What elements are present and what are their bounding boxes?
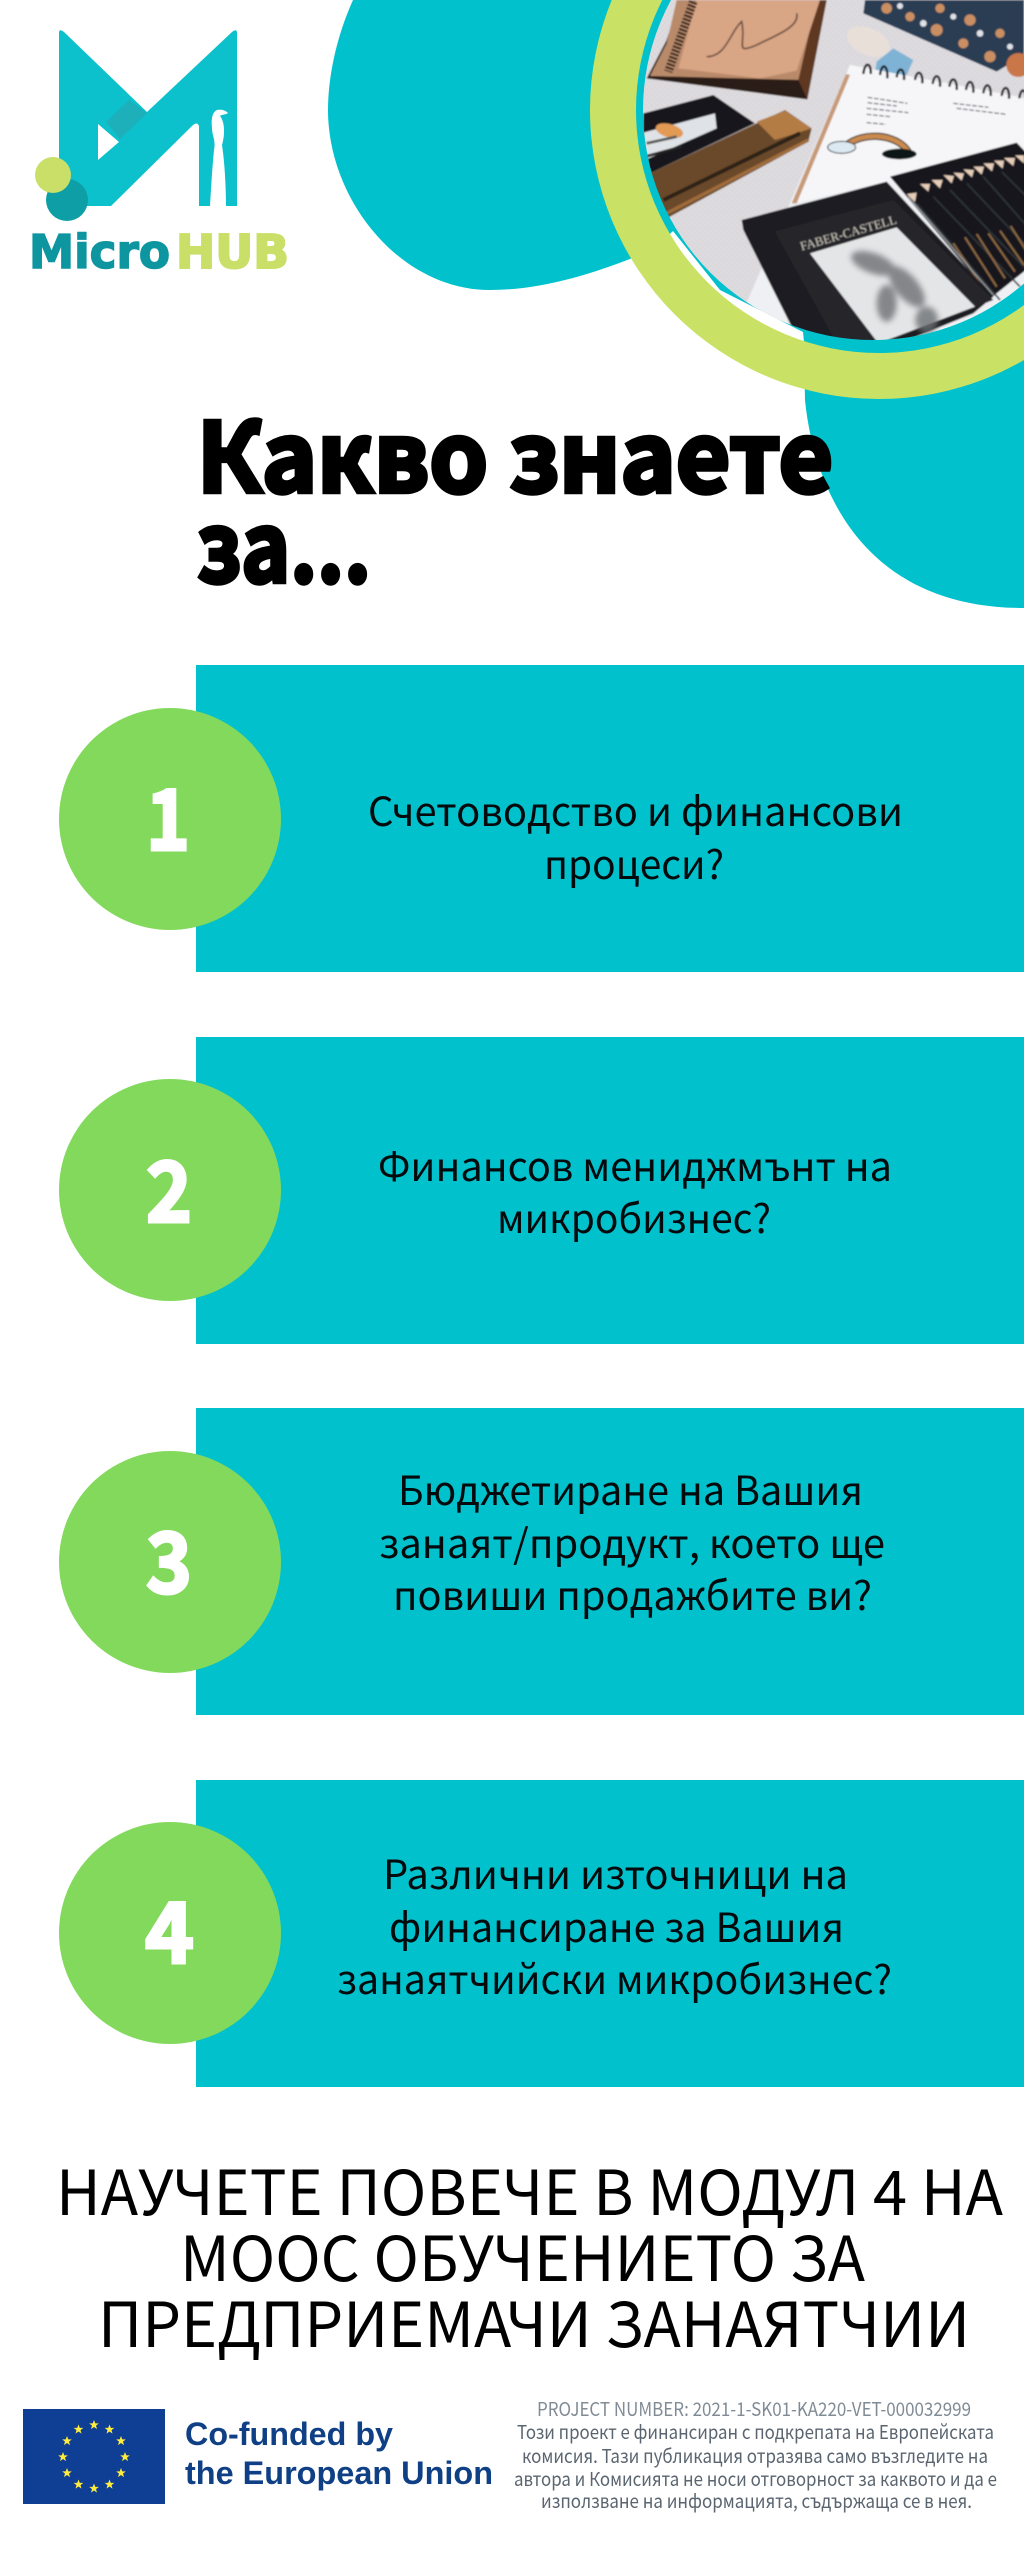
photo: art supplies on a table	[643, 0, 1024, 340]
panel: question 4	[59, 1780, 1024, 2087]
panel: question 3	[59, 1408, 1024, 1715]
icon: EU flag	[23, 2409, 165, 2504]
logo wordmark: HUB	[176, 225, 289, 279]
co-funded label: the European Union	[185, 2455, 493, 2491]
call to action heading: НАУЧЕТЕ ПОВЕЧЕ В МОДУЛ 4 НА	[56, 2143, 1003, 2233]
translucent brown case	[650, 110, 812, 218]
title	[197, 381, 833, 610]
notebook page	[746, 124, 1024, 336]
question text 3: занаят/продукт, което ще	[379, 1512, 885, 1570]
logo: MicroHUB	[29, 30, 289, 279]
logo wordmark: Micro	[29, 225, 170, 279]
disclaimer text: PROJECT NUMBER: 2021-1-SK01-KA220-VET-000032999	[537, 2395, 971, 2422]
question text 2: микробизнес?	[497, 1187, 771, 1245]
photo: art supplies on a table: FABER-CASTELL	[799, 213, 898, 254]
question text 4: финансиране за Вашия	[389, 1896, 844, 1954]
floral pencil case	[863, 0, 1024, 72]
pencil tin	[890, 143, 1024, 297]
co-funded label: Co-funded by	[185, 2416, 393, 2452]
question text 2: Финансов мениджмънт на	[378, 1135, 892, 1193]
decorative teal blob: right	[803, 300, 1024, 608]
disclaimer text	[514, 2395, 997, 2514]
question text 1	[368, 780, 903, 891]
number badge 3: 3	[146, 1497, 192, 1618]
logo mark: M	[59, 30, 237, 206]
title: Какво знаете	[197, 381, 833, 520]
call to action heading	[56, 2143, 1003, 2365]
call to action heading: ПРЕДПРИЕМАЧИ ЗАНАЯТЧИИ	[98, 2275, 970, 2365]
number badge 3	[59, 1451, 281, 1673]
sketch tin	[742, 182, 993, 350]
number badge 1: 1	[146, 754, 190, 875]
sketchbook	[647, 0, 827, 99]
decorative teal blob: top	[328, 0, 720, 290]
question text 3	[379, 1459, 885, 1622]
black brush box	[643, 95, 755, 173]
erasers	[848, 26, 890, 57]
number badge 2: 2	[146, 1126, 192, 1247]
notebook spiral	[863, 65, 1024, 101]
question text 3: повиши продажбите ви?	[393, 1564, 872, 1622]
co-funded label	[185, 2416, 493, 2491]
call to action heading: МООС ОБУЧЕНИЕТО ЗА	[180, 2209, 865, 2299]
question text 4	[337, 1843, 892, 2006]
panel: question 2	[59, 1037, 1024, 1344]
number badge 4	[59, 1822, 281, 2044]
question text 2	[378, 1135, 892, 1245]
number badge 1	[59, 708, 281, 930]
panel: question 1	[59, 665, 1024, 972]
rainbow	[847, 136, 908, 152]
question text 4: занаятчийски микробизнес?	[337, 1948, 892, 2006]
handwriting	[867, 97, 1007, 124]
logo wordmark	[29, 225, 289, 279]
title: за...	[197, 471, 371, 610]
disclaimer text: използване на информацията, съдържаща се в нея.	[541, 2487, 972, 2514]
photo frame with teal and lime rings	[590, 0, 1024, 399]
question text 1: процеси?	[544, 833, 724, 891]
number badge 2	[59, 1079, 281, 1301]
question text 4: Различни източници на	[383, 1843, 848, 1901]
number badge 4: 4	[145, 1867, 194, 1988]
question text 1: Счетоводство и финансови	[368, 780, 903, 838]
question text 3: Бюджетиране на Вашия	[398, 1459, 863, 1517]
